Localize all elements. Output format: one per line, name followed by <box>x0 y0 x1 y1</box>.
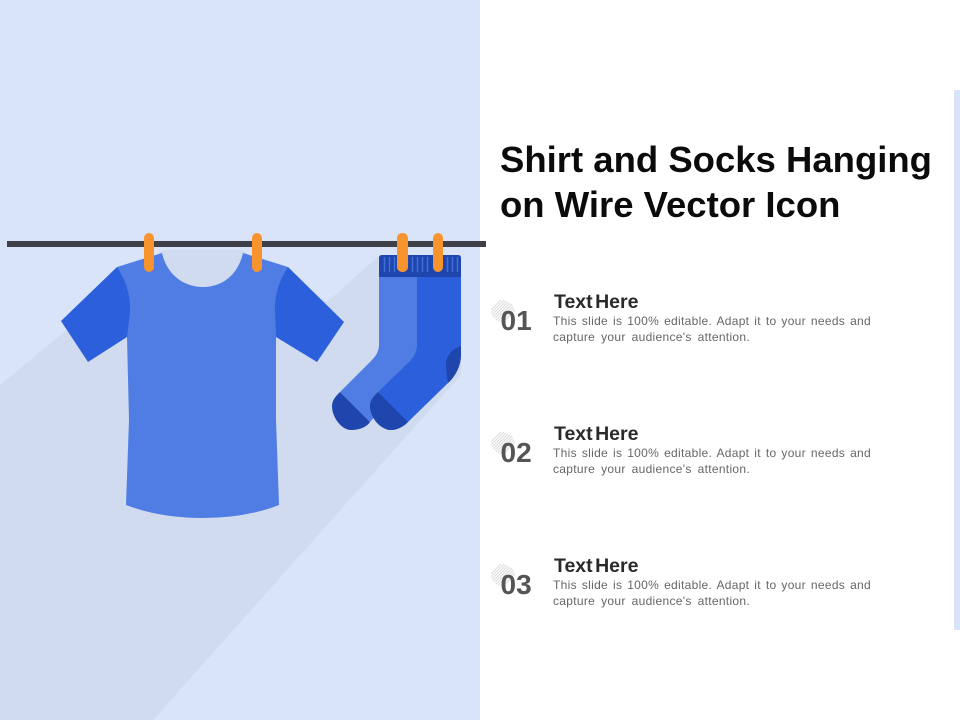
clothes pins <box>144 233 443 272</box>
left background panel <box>0 0 480 720</box>
number 01: 01 <box>500 305 532 336</box>
light sock toe <box>332 392 370 430</box>
hatch mark 03 <box>490 564 516 586</box>
right sleeve <box>260 267 344 362</box>
number 02: 02 <box>500 437 532 468</box>
item 02 <box>490 423 871 476</box>
item 03 <box>490 555 871 608</box>
body text 01 <box>553 314 871 344</box>
illustration: shirt and socks on wire <box>0 233 486 720</box>
body text 03: This slide is 100% editable. Adapt it to your needs and <box>553 578 871 592</box>
body text 02: This slide is 100% editable. Adapt it to your needs and <box>553 446 871 460</box>
right edge accent bar <box>954 90 960 630</box>
body text 03 <box>553 578 871 608</box>
sock cuffs <box>379 255 461 277</box>
title: Shirt and Socks Hanging <box>500 139 932 180</box>
dark sock toe <box>370 392 408 430</box>
body text 02 <box>553 446 871 476</box>
long drop shadow <box>0 250 461 720</box>
heading 01: Text Here <box>554 291 638 313</box>
shirt body <box>117 253 288 518</box>
dark sock <box>370 270 461 430</box>
body text 01: capture your audience's attention. <box>553 330 750 344</box>
hatch mark 02 <box>490 432 516 454</box>
title <box>500 139 932 225</box>
hatch mark 01 <box>490 300 516 322</box>
title: on Wire Vector Icon <box>500 184 840 225</box>
dark sock heel <box>446 346 461 383</box>
body text 03: capture your audience's attention. <box>553 594 750 608</box>
body text 02: capture your audience's attention. <box>553 462 750 476</box>
item 01 <box>490 291 871 344</box>
t-shirt <box>61 253 344 518</box>
heading 03: Text Here <box>554 555 638 577</box>
wire <box>7 241 486 247</box>
light sock <box>340 270 430 422</box>
body text 01: This slide is 100% editable. Adapt it to your needs and <box>553 314 871 328</box>
left sleeve <box>61 267 145 362</box>
heading 02: Text Here <box>554 423 638 445</box>
socks <box>332 255 461 430</box>
cuff ribs <box>384 257 458 272</box>
number 03: 03 <box>500 569 532 600</box>
